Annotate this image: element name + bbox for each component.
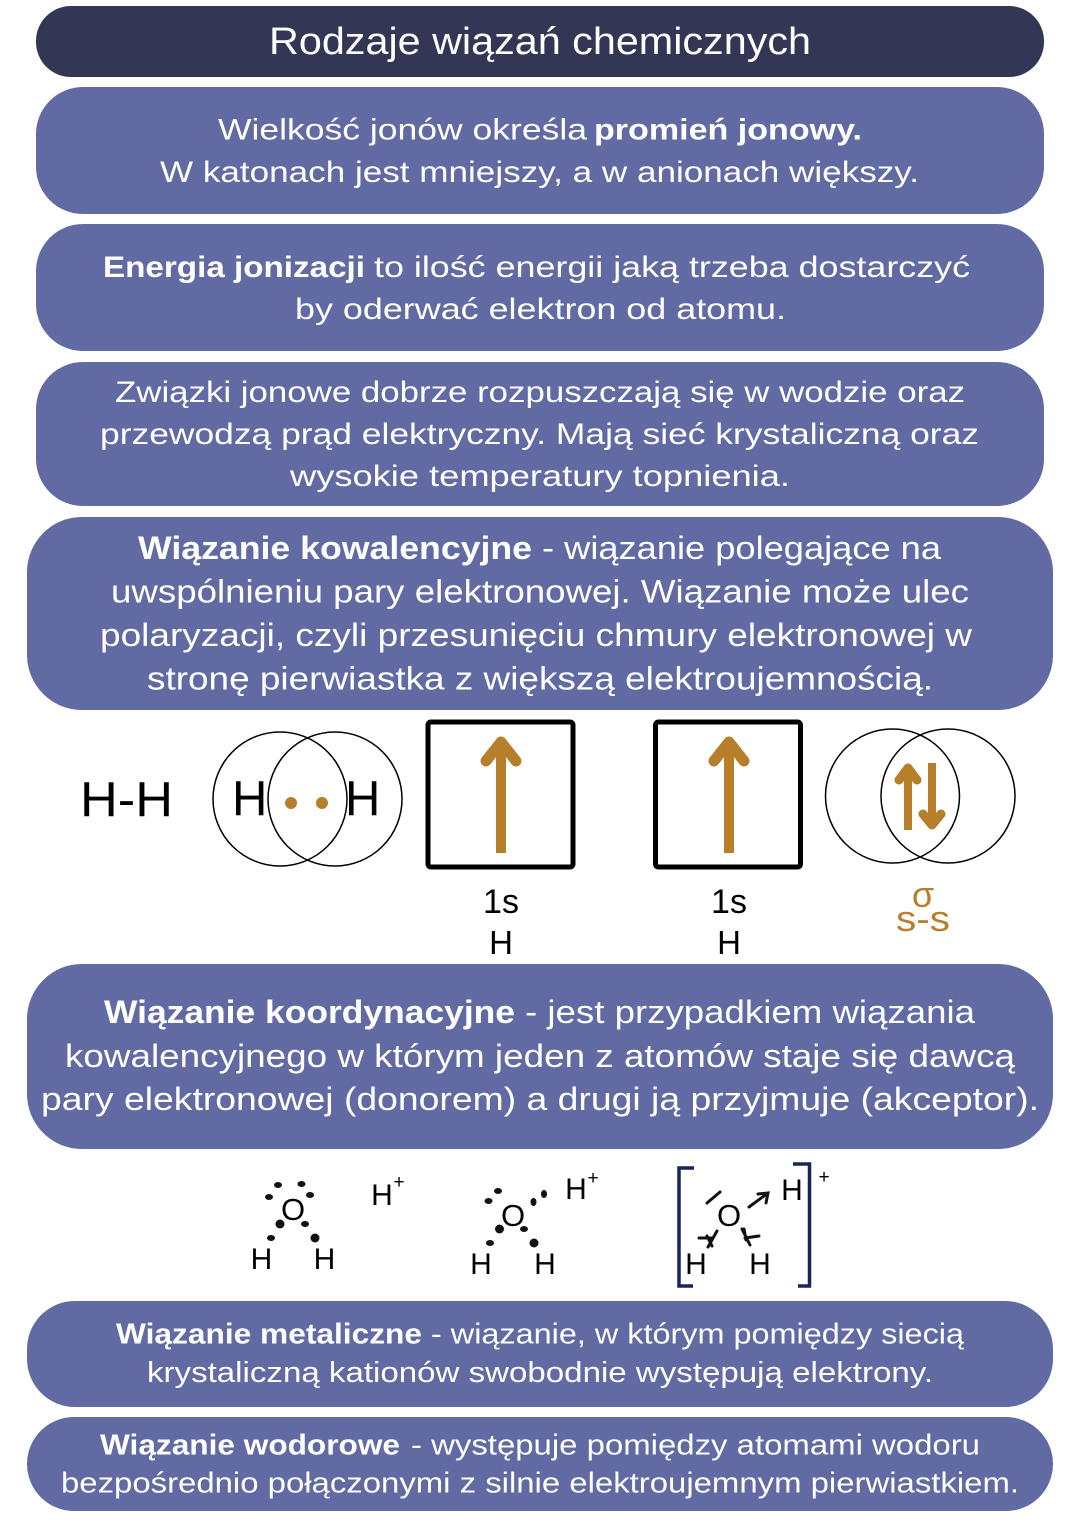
panel: wiązanie metaliczne (27, 1301, 1053, 1407)
panel: wiązanie wodorowe: bezpośrednio połączonymi z silnie elektroujemnym pierwiastkiem. (61, 1468, 1019, 1500)
panel: wiązanie wodorowe: - występuje pomiędzy atomami wodoru (411, 1430, 980, 1462)
title banner (36, 6, 1044, 77)
panel: związki jonowe: Związki jonowe dobrze rozpuszczają się w wodzie oraz (115, 376, 965, 409)
panel: wiązanie kowalencyjne: - wiązanie polegające na (542, 530, 941, 566)
panel: wiązanie metaliczne: krystaliczną kationów swobodnie występują elektrony. (147, 1357, 933, 1389)
diagram: proton approaching water: H (534, 1248, 556, 1281)
diagram: water molecule and free proton: O (281, 1192, 305, 1227)
panel: wiązanie metaliczne: Wiązanie metaliczne (116, 1318, 422, 1350)
panel: energia jonizacji (36, 224, 1044, 351)
panel: wiązanie metaliczne: - wiązanie, w którym pomiędzy siecią (431, 1318, 965, 1350)
diagram: proton approaching water: H (565, 1173, 587, 1206)
panel: wiązanie kowalencyjne: polaryzacji, czyli przesunięciu chmury elektronowej w (100, 617, 973, 653)
panel: wiązanie kowalencyjne: uwspólnieniu pary elektronowej. Wiązanie może ulec (111, 574, 969, 610)
panel: wiązanie koordynacyjne: - jest przypadkiem wiązania (525, 994, 975, 1030)
diagram: water molecule and free proton (251, 1172, 405, 1276)
panel: promień jonowy: W katonach jest mniejszy, a w anionach większy. (160, 156, 919, 189)
diagram: proton approaching water: O (501, 1198, 525, 1233)
panel: wiązanie wodorowe (27, 1417, 1053, 1511)
panel: energia jonizacji: Energia jonizacji (103, 251, 365, 284)
panel: promień jonowy (36, 87, 1044, 214)
diagram: sigma bond overlap with paired spins: σ (912, 874, 934, 915)
panel: wiązanie koordynacyjne: pary elektronowej (donorem) a drugi ją przyjmuje (akceptor). (41, 1081, 1039, 1117)
diagram: overlapping circles with shared electrons: H (345, 772, 380, 826)
diagram: sigma bond overlap with paired spins: s-s (896, 898, 950, 939)
diagram: water molecule and free proton: H (314, 1243, 335, 1276)
orbital box 1s H left: 1s (483, 883, 519, 921)
panel: wiązanie koordynacyjne: Wiązanie koordynacyjne (104, 994, 515, 1030)
H-H formula: H-H (80, 773, 173, 827)
title banner: Rodzaje wiązań chemicznych (269, 21, 811, 63)
panel: wiązanie koordynacyjne: kowalencyjnego w którym jeden z atomów staje się dawcą (65, 1038, 1015, 1074)
diagram: hydronium ion in brackets: O (717, 1198, 741, 1233)
panel: wiązanie wodorowe: Wiązanie wodorowe (100, 1430, 400, 1462)
panel: energia jonizacji: to ilość energii jaką trzeba dostarczyć (374, 251, 970, 284)
diagram: hydronium ion in brackets: H (781, 1174, 803, 1207)
panel: związki jonowe (36, 362, 1044, 506)
diagram: water molecule and free proton: + (393, 1172, 405, 1193)
diagram: hydronium ion in brackets: + (818, 1167, 830, 1188)
orbital box 1s H left: H (489, 924, 513, 961)
diagram: sigma bond overlap with paired spins (826, 729, 1015, 939)
diagram: proton approaching water: H (470, 1248, 492, 1281)
panel: związki jonowe: przewodzą prąd elektryczny. Mają sieć krystaliczną oraz (100, 418, 979, 451)
diagram: overlapping circles with shared electrons: H (232, 772, 267, 826)
panel: promień jonowy: Wielkość jonów określa (218, 114, 587, 146)
diagram: water molecule and free proton: H (251, 1243, 272, 1276)
diagram: hydronium ion in brackets: H (685, 1248, 707, 1281)
orbital box 1s H left (428, 722, 573, 961)
panel: promień jonowy: promień jonowy. (594, 114, 862, 146)
diagram: proton approaching water: + (587, 1168, 599, 1189)
panel: wiązanie koordynacyjne (27, 964, 1053, 1149)
orbital box 1s H right: 1s (711, 883, 747, 921)
diagram: proton approaching water (470, 1168, 599, 1281)
diagram: overlapping circles with shared electrons (213, 732, 402, 866)
diagram: water molecule and free proton: H (371, 1179, 393, 1212)
diagram: hydronium ion in brackets: H (749, 1248, 771, 1281)
panel: związki jonowe: wysokie temperatury topnienia. (289, 460, 790, 493)
panel: wiązanie kowalencyjne: stronę pierwiastka z większą elektroujemnością. (147, 660, 933, 696)
panel: wiązanie kowalencyjne: Wiązanie kowalencyjne (138, 530, 532, 566)
panel: wiązanie kowalencyjne (27, 517, 1053, 710)
diagram: hydronium ion in brackets (679, 1164, 830, 1286)
orbital box 1s H right: H (717, 924, 741, 961)
panel: energia jonizacji: by oderwać elektron od atomu. (295, 293, 786, 326)
orbital box 1s H right (656, 722, 800, 961)
